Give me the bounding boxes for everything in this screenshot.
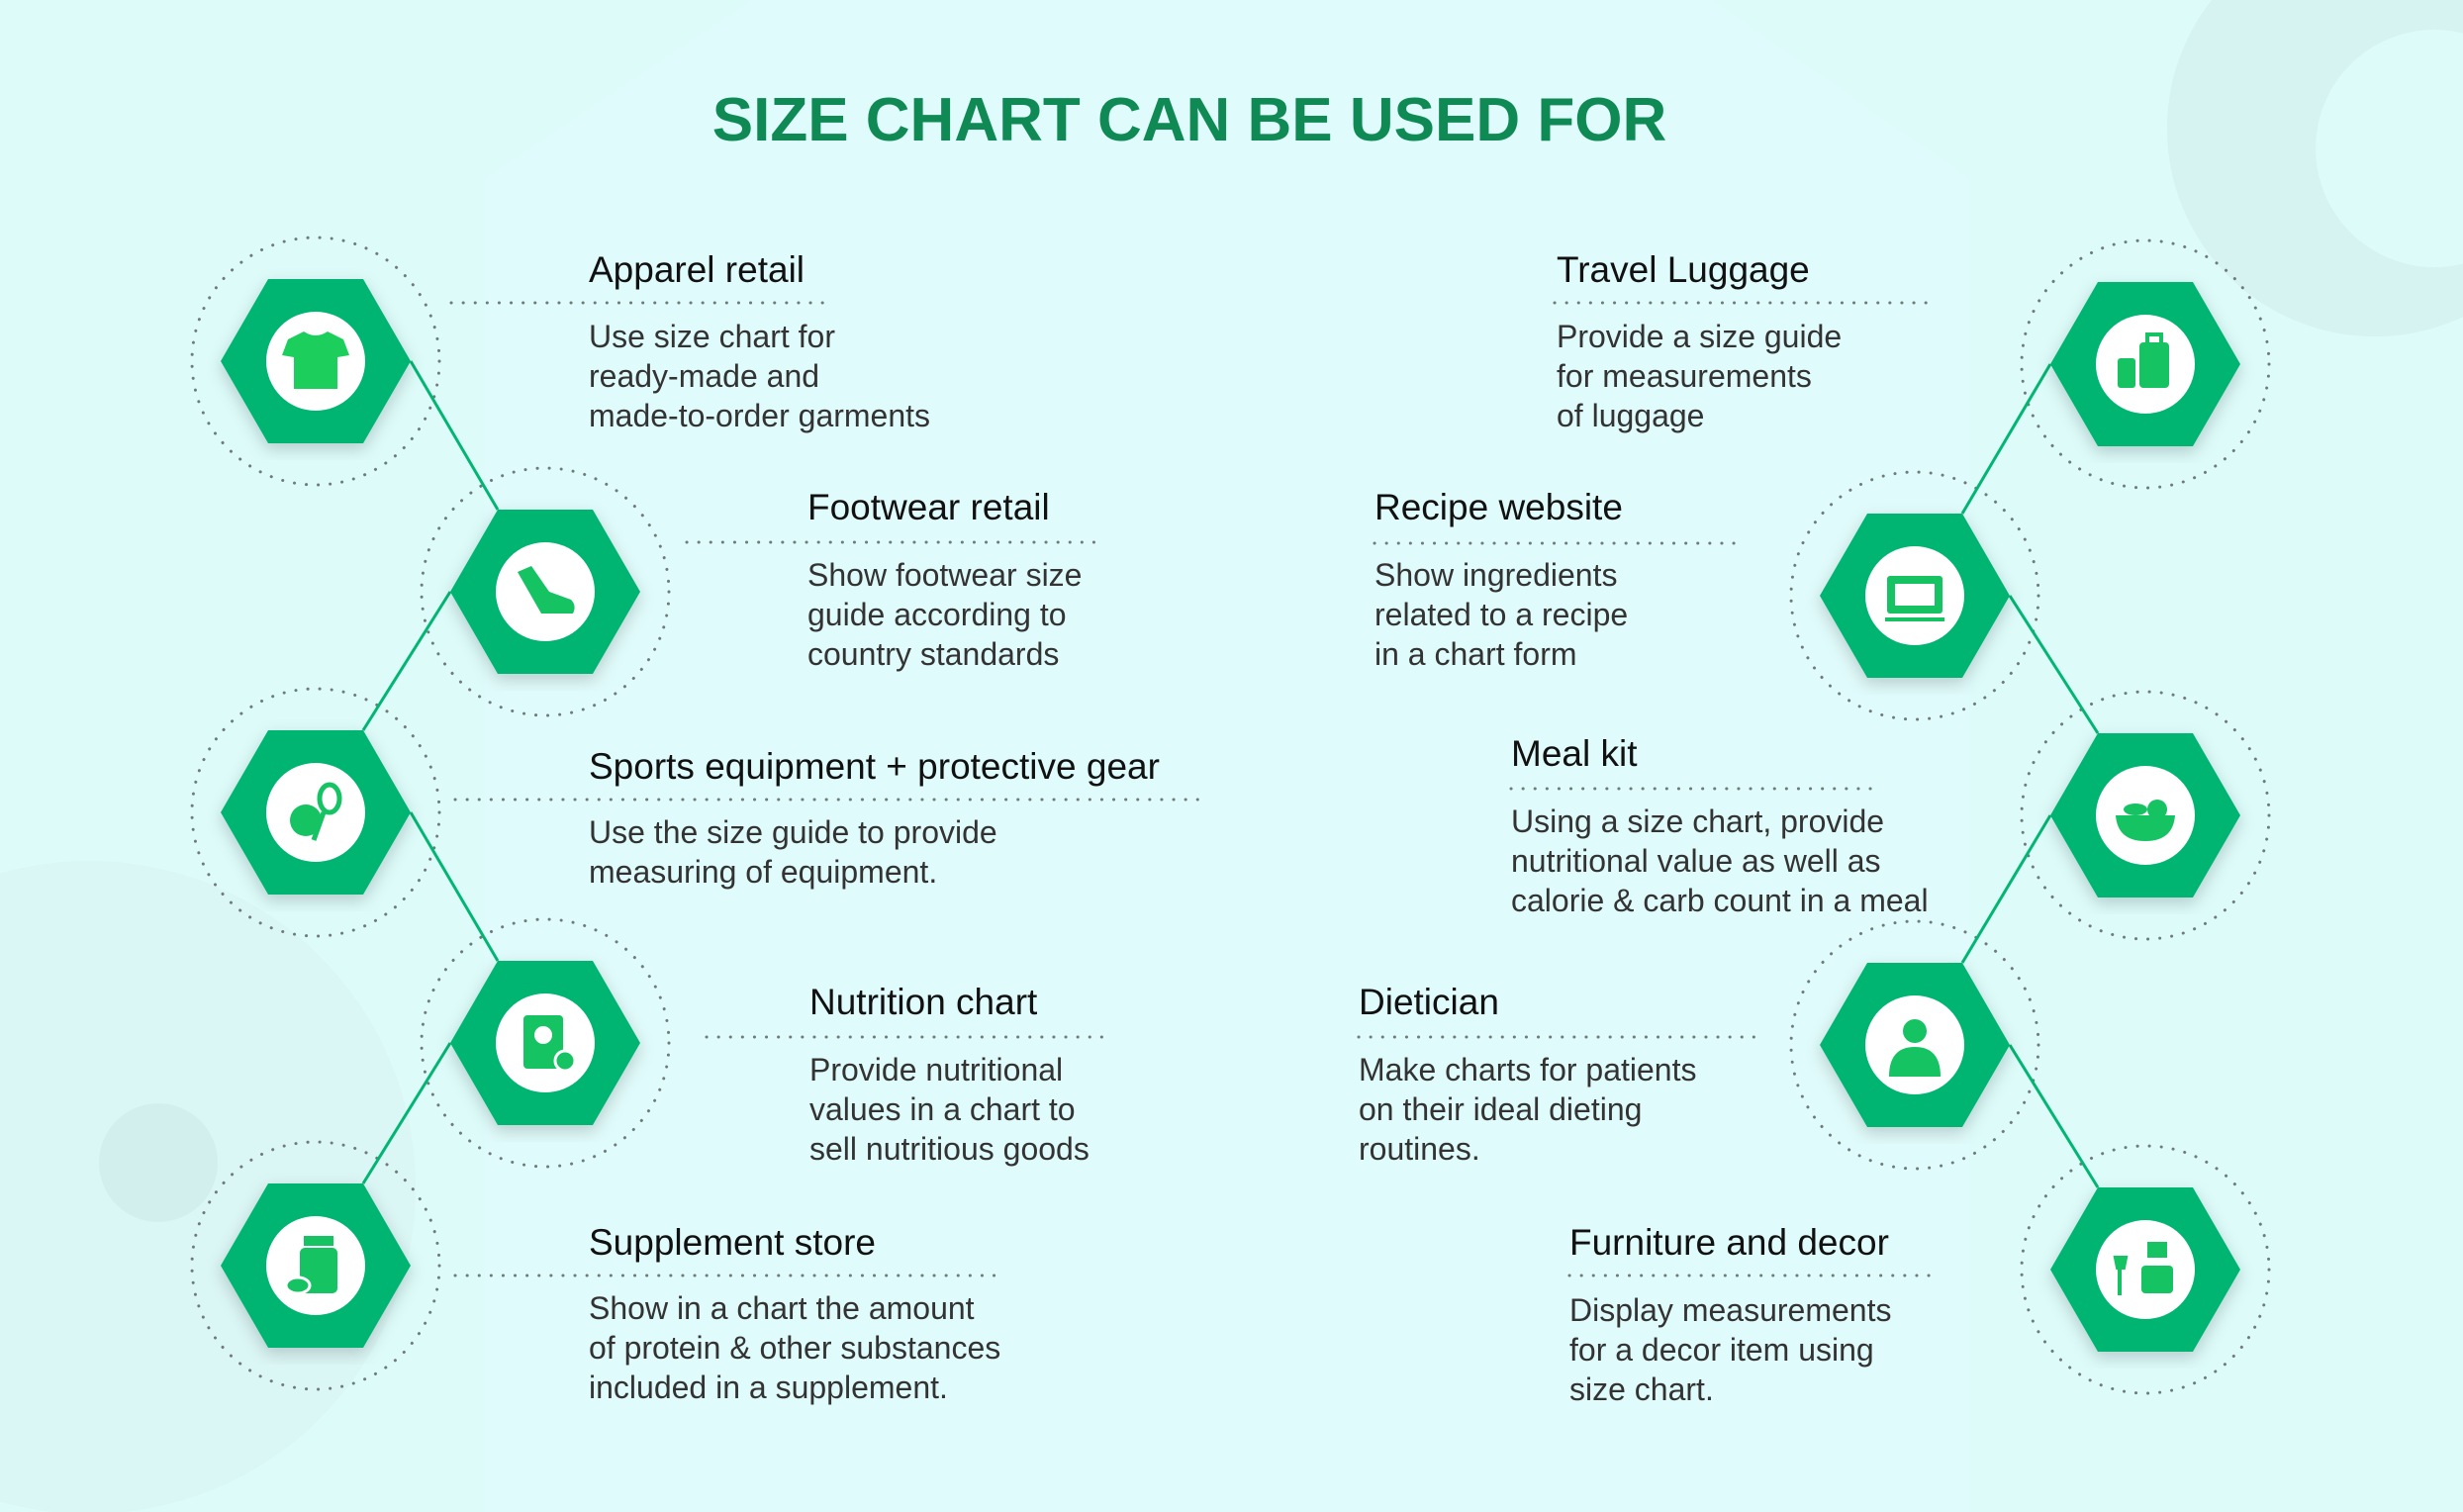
heading: furniture: Furniture and decor (1569, 1222, 1889, 1263)
heading: footwear: Footwear retail (807, 487, 1050, 527)
text: footwear: Show footwear size (807, 557, 1082, 593)
icon: footwear (450, 510, 640, 674)
text: meal kit: nutritional value as well as (1511, 843, 1881, 879)
heading: nutrition: Nutrition chart (809, 982, 1037, 1022)
text: recipe: related to a recipe (1374, 597, 1628, 632)
text: travel (1557, 319, 1842, 433)
heading: recipe: Recipe website (1374, 487, 1623, 527)
text: recipe: Show ingredients (1374, 557, 1617, 593)
text: nutrition: values in a chart to (809, 1091, 1076, 1127)
icon: luggage (2050, 282, 2240, 446)
text: meal kit: Using a size chart, provide (1511, 803, 1884, 839)
icon: furniture (2050, 1187, 2240, 1352)
text: furniture (1569, 1292, 1891, 1407)
text: supplement: Show in a chart the amount (589, 1290, 975, 1326)
text: footwear: guide according to (807, 597, 1067, 632)
icon: recipe (1820, 514, 2010, 678)
text: sports: Use the size guide to provide (589, 814, 997, 850)
heading: apparel: Apparel retail (589, 249, 805, 290)
heading: supplement: Supplement store (589, 1222, 876, 1263)
heading: meal kit: Meal kit (1511, 733, 1637, 774)
heading: dietician: Dietician (1359, 982, 1499, 1022)
text: recipe: in a chart form (1374, 636, 1577, 672)
panel: supplement store (589, 1222, 1000, 1405)
panel: recipe website (1374, 487, 1628, 672)
text: footwear: country standards (807, 636, 1059, 672)
panel: meal kit (1511, 733, 1929, 918)
panel: apparel retail (589, 249, 930, 433)
text: apparel: Use size chart for (589, 319, 835, 354)
text: supplement: of protein & other substances (589, 1330, 1000, 1366)
icon: meal kit (2050, 733, 2240, 898)
text: furniture: Display measurements (1569, 1292, 1891, 1328)
text: supplement: included in a supplement. (589, 1370, 948, 1405)
text: sports (589, 814, 997, 890)
icon: dietician (1820, 963, 2010, 1127)
text: dietician: Make charts for patients (1359, 1052, 1696, 1087)
text: nutrition: Provide nutritional (809, 1052, 1063, 1087)
text: dietician: routines. (1359, 1131, 1480, 1167)
panel: nutrition chart (809, 982, 1089, 1167)
text: nutrition (809, 1052, 1089, 1167)
text: furniture: size chart. (1569, 1371, 1714, 1407)
icon: supplement (221, 1183, 411, 1348)
icon: apparel (221, 279, 411, 443)
icon: sports (221, 730, 411, 895)
panel: footwear retail (807, 487, 1082, 672)
icon: nutrition chart (450, 961, 640, 1125)
text: apparel: made-to-order garments (589, 398, 930, 433)
text: footwear (807, 557, 1082, 672)
text: sports: measuring of equipment. (589, 854, 937, 890)
text: recipe (1374, 557, 1628, 672)
heading: travel: Travel Luggage (1557, 249, 1810, 290)
text: apparel: ready-made and (589, 358, 819, 394)
heading: sports: Sports equipment + protective gear (589, 746, 1160, 787)
panel: travel luggage (1557, 249, 1842, 433)
panel: furniture and decor (1569, 1222, 1891, 1407)
text: nutrition: sell nutritious goods (809, 1131, 1089, 1167)
panel: dietician (1359, 982, 1696, 1167)
text: furniture: for a decor item using (1569, 1332, 1874, 1368)
text: travel: of luggage (1557, 398, 1704, 433)
text: meal kit: calorie & carb count in a meal (1511, 883, 1929, 918)
panel: sports (589, 746, 1160, 890)
text: dietician (1359, 1052, 1696, 1167)
text: travel: for measurements (1557, 358, 1812, 394)
text: dietician: on their ideal dieting (1359, 1091, 1642, 1127)
title: SIZE CHART CAN BE USED FOR (712, 86, 1666, 154)
text: meal kit (1511, 803, 1929, 918)
text: apparel (589, 319, 930, 433)
text: supplement (589, 1290, 1000, 1405)
text: travel: Provide a size guide (1557, 319, 1842, 354)
